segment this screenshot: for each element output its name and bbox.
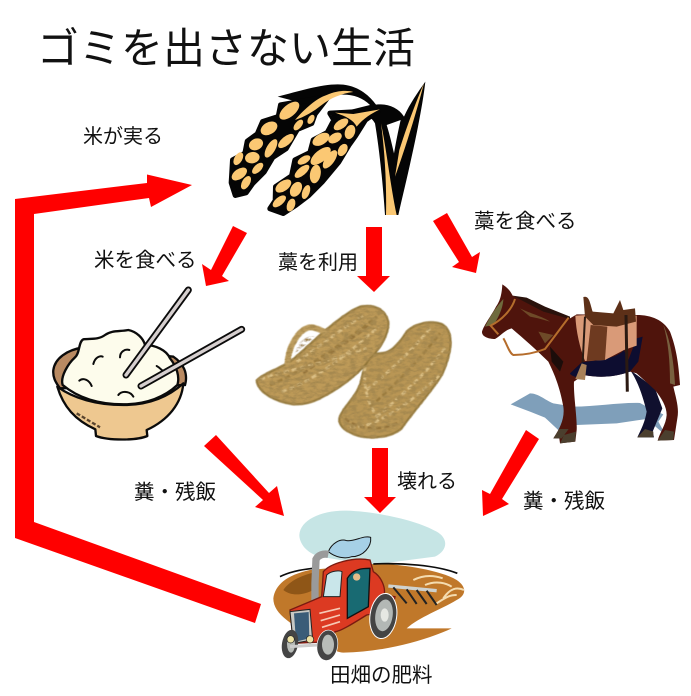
mane	[513, 296, 570, 319]
label: eat rice: 米を食べる	[94, 249, 196, 272]
coat highlight	[520, 308, 553, 343]
face highlight	[485, 299, 503, 327]
driver	[347, 568, 370, 618]
sky	[299, 511, 445, 565]
rice	[62, 330, 178, 404]
belly shadow	[570, 337, 643, 377]
label: manure and leftovers right: 糞・残飯	[523, 490, 605, 513]
icon: straw sandals	[257, 306, 451, 437]
body	[482, 284, 680, 443]
icon: saddled horse	[482, 284, 680, 443]
label: manure and leftovers left: 糞・残飯	[134, 481, 216, 504]
right sandal	[339, 322, 451, 437]
chopsticks	[126, 290, 242, 386]
rear wheel	[367, 592, 400, 640]
rump highlight	[663, 325, 675, 385]
arrow: field back to rice	[15, 174, 261, 623]
arrow: bowl to field	[204, 435, 284, 516]
far hind leg	[630, 370, 662, 437]
grains	[229, 83, 424, 215]
icon: tractor in field	[273, 511, 464, 662]
exhaust smoke	[328, 537, 371, 558]
stem and blades	[278, 82, 425, 215]
front wheels	[315, 629, 340, 662]
bowl stripes	[77, 413, 100, 427]
hood stripes	[319, 608, 340, 627]
girth strap	[626, 315, 627, 392]
title: ゴミを出さない生活	[37, 25, 415, 72]
arrow: rice to bowl	[202, 226, 247, 286]
rice marks	[79, 350, 163, 397]
saddle	[583, 297, 636, 327]
blade gap	[387, 120, 401, 153]
arrow: horse to field	[482, 430, 539, 516]
arrow: rice to sandals	[357, 227, 390, 292]
label: rice grows: 米が実る	[83, 125, 163, 148]
tractor body	[290, 559, 395, 643]
horizon lines	[280, 564, 457, 577]
label: broken: 壊れる	[397, 470, 457, 493]
icon: rice plant	[229, 82, 425, 215]
label: eat straw: 藁を食べる	[474, 210, 576, 233]
bumper and lights	[290, 645, 317, 647]
arrow: sandals to field	[364, 448, 396, 513]
label: use straw: 藁を利用	[278, 251, 358, 274]
soil clods	[413, 576, 464, 603]
left sandal	[257, 306, 388, 404]
ear silhouettes	[231, 97, 378, 213]
hooves	[553, 429, 674, 443]
arrow: rice to horse	[433, 213, 480, 273]
saddle blanket	[575, 315, 637, 361]
bowl rim interior	[53, 347, 186, 388]
label: field fertilizer: 田畑の肥料	[330, 664, 432, 687]
bowl body	[57, 383, 183, 439]
bridle and reins	[491, 299, 569, 355]
grille	[290, 609, 313, 643]
icon: rice bowl with chopsticks	[53, 290, 242, 439]
plough	[388, 586, 437, 591]
shadow	[511, 393, 666, 436]
sandal texture	[260, 315, 445, 428]
left strap	[287, 327, 327, 365]
exhaust pipe	[315, 554, 328, 603]
stirrup	[575, 363, 587, 380]
field	[273, 563, 464, 653]
cab window	[323, 571, 342, 597]
